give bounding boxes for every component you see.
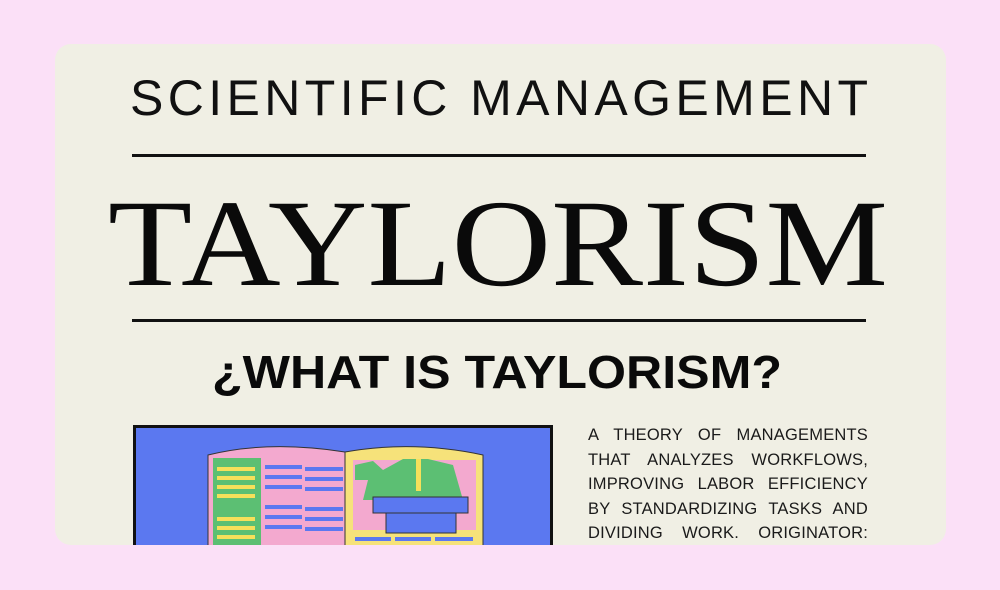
- text: BY STANDARDIZING TASKS AND: [588, 500, 868, 518]
- card: [55, 44, 946, 545]
- divider top: [132, 154, 866, 157]
- right page: [345, 447, 483, 555]
- text: DIVIDING WORK. ORIGINATOR:: [588, 524, 868, 542]
- text: THAT ANALYZES WORKFLOWS,: [588, 450, 868, 468]
- left page: [208, 447, 345, 558]
- bottom pink strip: [0, 545, 1000, 590]
- divider bottom: [132, 319, 866, 322]
- heading: scientific management: SCIENTIFIC MANAGEMENT: [130, 70, 868, 126]
- title: taylorism: TAYLORISM: [108, 175, 888, 312]
- body text: [588, 426, 868, 542]
- text: A THEORY OF MANAGEMENTS: [588, 426, 868, 444]
- header svg: [108, 70, 888, 398]
- illustration: open book: [133, 425, 553, 545]
- subheading: ¿WHAT IS TAYLORISM?: [212, 346, 782, 398]
- text: IMPROVING LABOR EFFICIENCY: [588, 475, 868, 493]
